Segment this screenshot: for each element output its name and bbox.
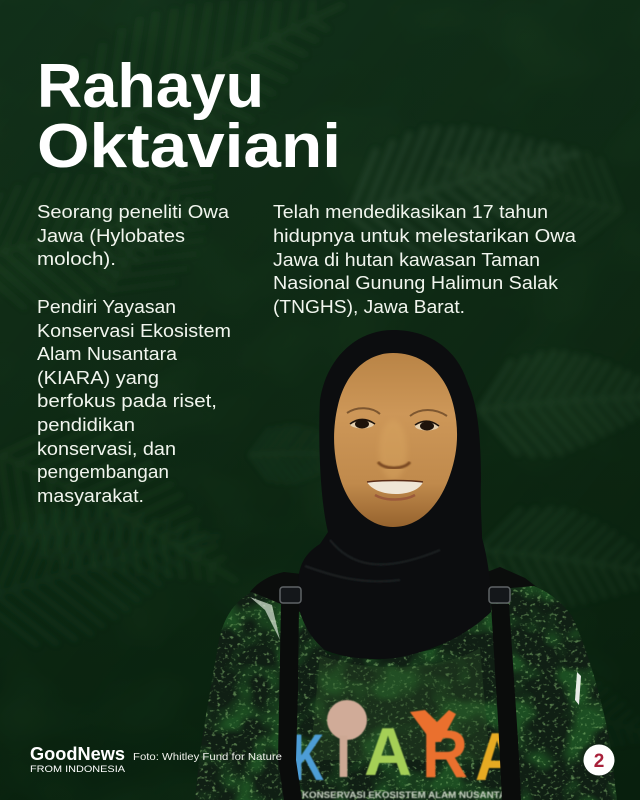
logo: GoodNews from Indonesia: FROM INDONESIA	[30, 764, 126, 775]
text block: right column	[273, 202, 577, 317]
text block: left column: konservasi, dan	[37, 439, 176, 459]
photo credit: Foto: Whitley Fund for Nature	[133, 751, 282, 763]
text block: right column: (TNGHS), Jawa Barat.	[273, 297, 465, 317]
text block: left column: Seorang peneliti Owa	[37, 202, 230, 222]
shirt logo: KIARA: R	[422, 716, 468, 792]
text block: right column: Telah mendedikasikan 17 tahun	[273, 202, 548, 222]
title	[37, 52, 341, 181]
text block: right column: Jawa di hutan kawasan Taman	[273, 250, 540, 270]
shirt logo: KIARA: A	[475, 719, 519, 795]
backpack shoulder pads	[250, 567, 538, 612]
shirt logo: KIARA	[292, 700, 521, 800]
shirt logo: KIARA: KONSERVASI EKOSISTEM ALAM NUSANTARA	[302, 790, 521, 800]
shirt	[190, 570, 625, 800]
title: Rahayu	[37, 52, 264, 121]
photo: woman in black hijab and KIARA shirt	[190, 330, 625, 800]
text block: left column	[37, 202, 231, 506]
text block: left column: Jawa (Hylobates	[37, 226, 185, 246]
shirt logo: KIARA: I	[336, 723, 351, 790]
face	[334, 353, 457, 527]
text block: right column: hidupnya untuk melestarikan Owa	[273, 226, 577, 246]
shirt logo: KIARA: K	[292, 720, 324, 794]
black hijab	[298, 330, 491, 659]
text block: left column: Konservasi Ekosistem	[37, 321, 231, 341]
title: Oktaviani	[37, 112, 341, 181]
backpack straps and buckles	[278, 587, 521, 800]
text block: left column: Pendiri Yayasan	[37, 297, 176, 317]
shirt logo: KIARA: A	[364, 714, 412, 790]
text block: left column: masyarakat.	[37, 486, 144, 506]
logo: GoodNews from Indonesia	[30, 743, 126, 775]
text block: left column: pendidikan	[37, 415, 135, 435]
text block: left column: berfokus pada riset,	[37, 391, 217, 411]
text block: right column: Nasional Gunung Halimun Salak	[273, 273, 559, 293]
text block: left column: (KIARA) yang	[37, 368, 159, 388]
page number badge	[584, 744, 614, 776]
text block: left column: moloch).	[37, 249, 116, 269]
logo: GoodNews from Indonesia: GoodNews	[30, 743, 125, 764]
text block: left column: pengembangan	[37, 462, 169, 482]
page number badge: 2	[594, 751, 604, 772]
text block: left column: Alam Nusantara	[37, 344, 178, 364]
